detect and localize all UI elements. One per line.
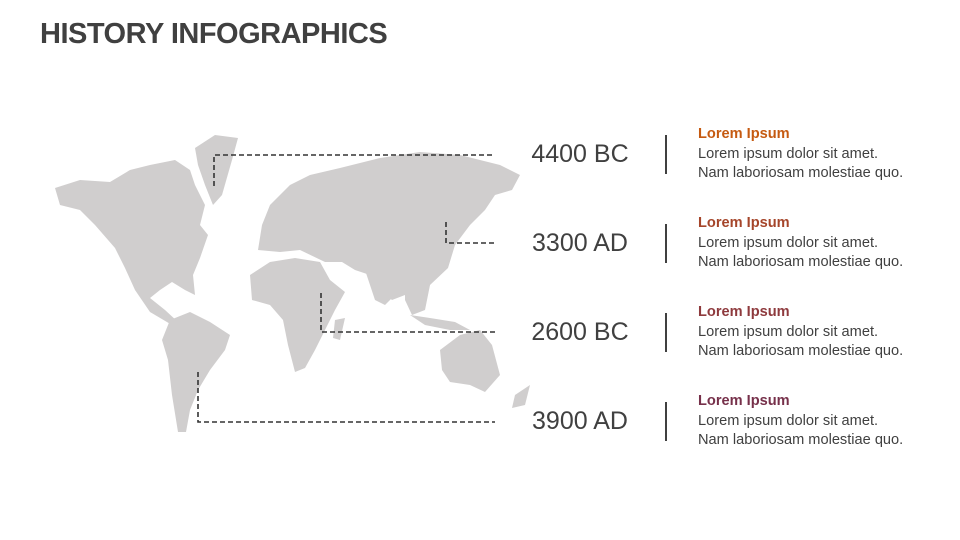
date 3: 2600 BC: [531, 318, 629, 346]
text block 4: [698, 393, 903, 448]
text block 1: Nam laboriosam molestiae quo.: [698, 165, 903, 181]
text block 2: Lorem ipsum dolor sit amet.: [698, 234, 878, 250]
text block 4: Nam laboriosam molestiae quo.: [698, 432, 903, 448]
text block 3: [698, 304, 903, 359]
date 4: 3900 AD: [532, 407, 628, 435]
divider 3: [665, 313, 667, 352]
date 2: 3300 AD: [532, 229, 628, 257]
date 1: 4400 BC: [531, 140, 629, 168]
text block 3: Nam laboriosam molestiae quo.: [698, 343, 903, 359]
map: [55, 135, 530, 432]
text block 3: Lorem ipsum dolor sit amet.: [698, 324, 878, 340]
divider 2: [665, 224, 667, 263]
text block 2: Nam laboriosam molestiae quo.: [698, 254, 903, 270]
text block 4: Lorem ipsum dolor sit amet.: [698, 412, 878, 428]
text block 1: Lorem ipsum dolor sit amet.: [698, 146, 878, 162]
connector lines: [198, 155, 495, 422]
text block 1: [698, 126, 903, 181]
text block 1: Lorem Ipsum: [698, 126, 790, 142]
text block 2: Lorem Ipsum: [698, 215, 790, 231]
text block 2: [698, 215, 903, 270]
title: HISTORY INFOGRAPHICS: [40, 18, 387, 50]
text block 3: Lorem Ipsum: [698, 304, 790, 320]
divider 4: [665, 402, 667, 441]
divider 1: [665, 135, 667, 174]
text block 4: Lorem Ipsum: [698, 393, 790, 409]
